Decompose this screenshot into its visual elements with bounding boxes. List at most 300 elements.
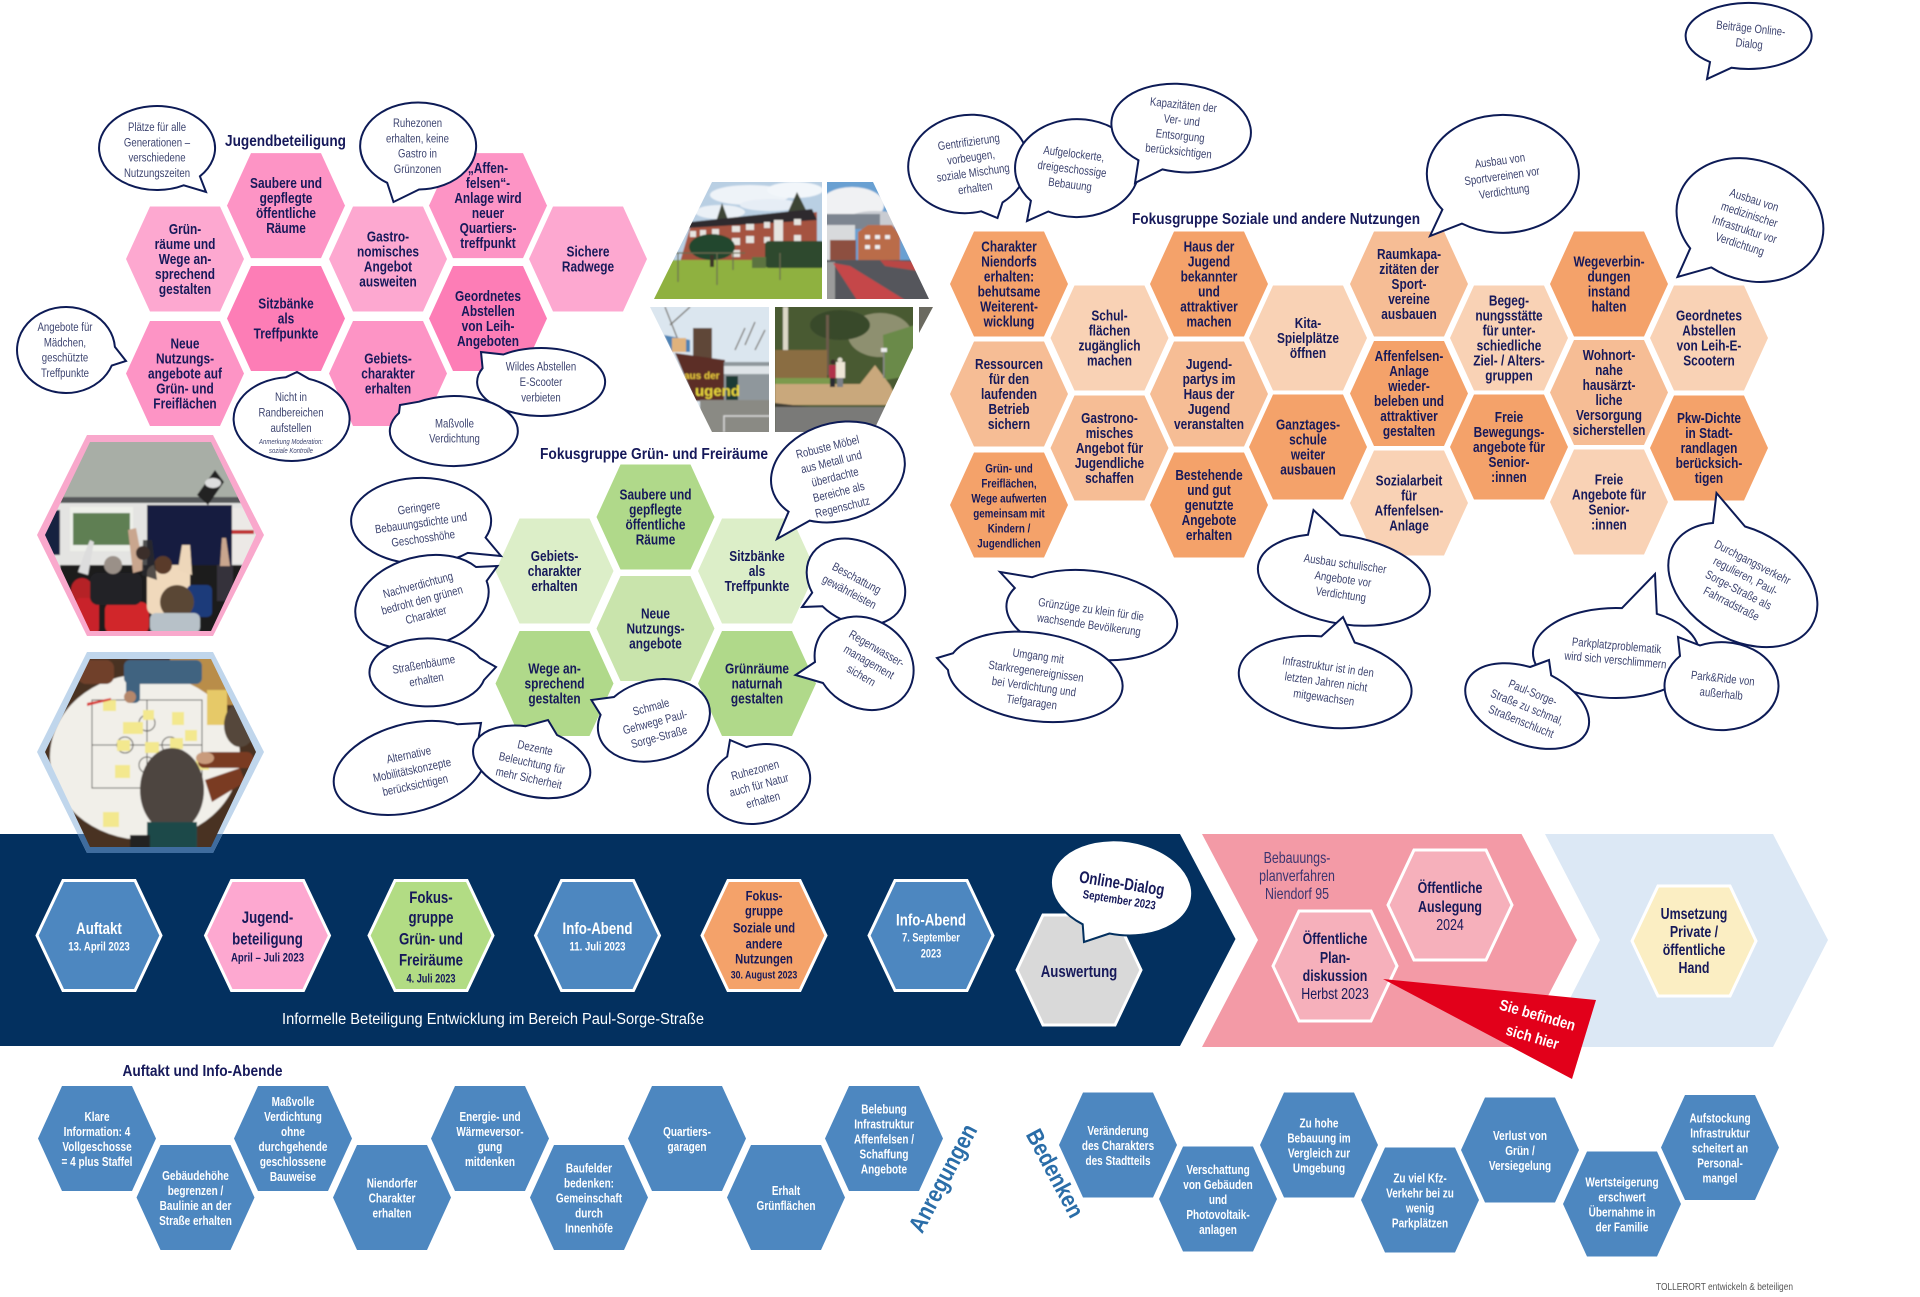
hexagon: Geordnetes Abstellen: Abstellen (461, 303, 515, 319)
callout: Plätze für alle Generationen: Generationen – (124, 136, 191, 150)
photo: Straße mit Radweg (827, 182, 929, 299)
photo sliver (919, 307, 933, 333)
timeline: Jugendbeteiligung: Jugend- (242, 909, 293, 927)
photo collage: Paul-Sorge-Straße (648, 180, 935, 435)
hexagon: Gebäudehöhe: Gebäudehöhe (162, 1169, 229, 1183)
callout: Ausbau von Sportvereinen: Ausbau von (1474, 151, 1526, 171)
callout: Grünzüge zu klein: wachsende Bevölkerung (1035, 611, 1142, 639)
hexagon: Wohnortnahe Versorgung: hausärzt- (1583, 377, 1635, 393)
hexagon: Raumkapazitäten: Sport- (1392, 276, 1426, 292)
callout: Robuste Möbel: Regenschutz (814, 495, 871, 521)
timeline: Öffentliche Auslegung: Auslegung (1418, 898, 1482, 915)
hexagon: Begegnungsstätte: nungsstätte (1475, 307, 1543, 324)
hexagon: Affenfelsen-Anlage: treffpunkt (460, 235, 516, 251)
hexagon: Belebung Infrastruktur: Angebote (861, 1162, 908, 1177)
hexagon: Haus der Jugend: bekannter (1181, 268, 1237, 285)
hexagon: Klare Information: Vollgeschosse (62, 1140, 132, 1154)
hexagon: Bestehende Angebote: und gut (1187, 482, 1231, 498)
callout: Paul-Sorge-Straße zu schmal: Paul-Sorge- (1506, 678, 1559, 709)
callout: Robuste Möbel: überdachte (810, 465, 860, 490)
callout: Park&Ride: Park&Ride von (1690, 669, 1755, 689)
hexagon: Haus der Jugend: Haus der (1184, 238, 1234, 255)
hexagon: Baufelder (530, 1145, 648, 1250)
hexagon: Neue Nutzungsangebote: Neue (641, 605, 670, 622)
callout: Umgang mit Starkregen: Umgang mit (1012, 646, 1065, 667)
hexagon: Freie Bewegungsangebote: Senior- (1489, 454, 1529, 470)
callout: Geringere Bebauungsdichte: Bebauungsdichte und (374, 511, 468, 537)
callout: Regenwassermanagement: sichern (844, 663, 878, 689)
hexagon: Pkw-Dichte: in Stadt- (1685, 425, 1733, 441)
callout: Infrastruktur nicht mitgewachsen: Infrastruktur ist in den (1281, 654, 1375, 680)
hexagon: Sitzbänke: Treffpunkte (725, 578, 789, 594)
callout: Robuste Möbel: aus Metall und (800, 449, 863, 477)
hexagon: Jugendpartys (1150, 342, 1268, 446)
callout: Ausbau von Sportvereinen: Verdichtung (1478, 182, 1530, 202)
timeline: Jugendbeteiligung (206, 880, 330, 990)
callout: Aufgelockerte Bebauung: dreigeschossige (1037, 159, 1107, 180)
hexagon: Grünräume und Wege: gestalten (159, 281, 211, 297)
callout: Beiträge Online-Dialog: Beiträge Online- (1716, 19, 1786, 39)
hexagon: Verschattung (1159, 1146, 1277, 1252)
callout: Ruhezonen erhalten: Ruhezonen (393, 117, 442, 130)
hexagon: Sitzbänke: als (749, 563, 765, 579)
timeline: Öffentliche Auslegung: 2024 (1436, 916, 1464, 933)
timeline: Info-Abend 11. Juli: Info-Abend (563, 920, 632, 938)
hexagon: Geordnetes Abstellen: Angeboten (457, 333, 519, 349)
hexagon: Wege ansprechend: sprechend (524, 675, 585, 692)
callout: Ruhezonen erhalten: Gastro in (398, 148, 437, 161)
hexagon: Grün- und Freiflächen: gemeinsam mit (973, 508, 1045, 521)
hexagon: Grün- und Freiflächen: Freiflächen, (981, 478, 1037, 491)
hexagon: Neue Nutzungsangebote: angebote (629, 635, 682, 652)
callout: Geringere Bebauungsdichte: Geschosshöhe (391, 528, 456, 550)
hexagon: Quartiersgaragen (628, 1086, 746, 1191)
timeline: Auftakt (37, 880, 161, 990)
callout: Ruhezonen für Natur (708, 740, 810, 824)
hexagon: Gebietscharakter: erhalten (531, 578, 578, 594)
hexagon: Saubere und gepflegte Räume: öffentliche (625, 516, 686, 533)
hexagon: Saubere und gepflegte Räume: Räume (636, 531, 675, 548)
hexagon: Neue Nutzungsangebote: Neue (170, 335, 200, 352)
hexagon: Veränderung des Charakters (1059, 1092, 1177, 1198)
hexagon: Geordnetes Abstellen: von Leih- (462, 318, 514, 334)
hexagon: Bestehende Angebote (1150, 452, 1268, 558)
panel: Fokusgruppe Grün hexagons (496, 464, 816, 736)
callout: Nachverdichtung: Charakter (404, 604, 449, 627)
callout: Infrastruktur nicht mitgewachsen (1239, 617, 1412, 728)
hexagon: Baufelder: bedenken: (564, 1176, 614, 1191)
hexagon: Wohnortnahe Versorgung: liche (1595, 392, 1623, 408)
hexagon: Veränderung des Charakters: des Stadtteils (1085, 1154, 1151, 1168)
marker: Sie befinden sich hier: Sie befinden (1497, 997, 1577, 1035)
hexagon: Affenfelsen-Anlage wiederbeleben: wieder- (1387, 378, 1430, 394)
marker: Sie befinden sich hier: sich hier (1504, 1022, 1561, 1054)
hexagon: Baufelder: Baufelder (566, 1161, 612, 1176)
callout: Beiträge Online-Dialog: Dialog (1735, 36, 1763, 52)
callout: Aufgelockerte Bebauung: Aufgelockerte, (1043, 144, 1105, 165)
callout: Aufgelockerte Bebauung: Bebauung (1048, 176, 1093, 194)
callout: Durchgangsverkehr: Sorge-Straße als (1703, 568, 1774, 613)
timeline: Fokusgruppe Grün- und Freiräume: 4. Juli 2023 (406, 974, 456, 986)
hexagon: Grünräume und Wege: räume und (155, 236, 215, 252)
callout: Alternative Mobilitätskonzepte: Mobilitätskonzepte (372, 756, 452, 785)
photo: Versammlung Auftakt (37, 435, 264, 636)
hexagon: Verlust von Grün: Versiegelung (1489, 1159, 1551, 1173)
callout: Umgang mit Starkregen: bei Verdichtung und (991, 675, 1077, 700)
hexagon: Zu viel Kfz-Verkehr (1361, 1148, 1479, 1252)
hexagon: Grün- und Freiflächen: Kindern / (988, 523, 1030, 536)
timeline: Fokusgruppe Soziale: andere (746, 936, 782, 952)
timeline: Umsetzung: Hand (1679, 959, 1709, 976)
hexagon: Wege ansprechend (496, 631, 614, 736)
hexagon: Wertsteigerung: der Familie (1596, 1220, 1649, 1235)
hexagon: Charakter Niendorfs: Weiterent- (980, 298, 1038, 315)
hexagon: Affenfelsen-Anlage: „Affen- (468, 160, 508, 176)
timeline: Auftakt: Auftakt (76, 920, 122, 938)
title: Auftakt und Info-Abende: Auftakt und Info-Abende (122, 1063, 283, 1080)
callout: Alternative Mobilitätskonzepte (334, 721, 486, 815)
hexagon: Bestehende Angebote: Angebote (1182, 512, 1236, 528)
timeline: Öffentliche Plandiskussion: Herbst 2023 (1301, 985, 1369, 1002)
hexagon: Gastronomisches Angebot: nomisches (357, 243, 419, 260)
timeline: Öffentliche Auslegung: Öffentliche (1418, 879, 1483, 896)
callout: Umgang mit Starkregen: Starkregenereignissen (988, 659, 1084, 685)
hexagon: Ressourcen: laufenden (981, 386, 1037, 402)
hexagon: Raumkapazitäten: ausbauen (1381, 306, 1437, 322)
hexagon: Affenfelsen-Anlage wiederbeleben: attraktiver (1380, 408, 1438, 424)
callout: Straßenbäume: Straßenbäume (391, 653, 456, 677)
hexagon: Wegeverbindungen: Wegeverbin- (1573, 253, 1645, 270)
hexagon: Schulflächen: zugänglich (1078, 337, 1141, 354)
hexagon: Gebietscharakter: Gebiets- (364, 350, 412, 367)
hexagon: Energie- und Wärmeversorgung: Wärmeversor- (456, 1125, 524, 1139)
hexagon: Sitzbänke: Sitzbänke (729, 548, 785, 564)
callout: Parkplatzproblematik: wird sich verschlimmern (1563, 650, 1667, 672)
hexagon: Sitzbänke (227, 266, 345, 371)
timeline: Jugendbeteiligung: April – Juli 2023 (231, 952, 304, 965)
timeline: Fokusgruppe Soziale: Soziale und (733, 920, 795, 936)
hexagon: Pkw-Dichte (1650, 396, 1768, 500)
hexagon: Haus der Jugend: und (1198, 283, 1220, 300)
callout: Nicht in Randbereichen: Nicht in (275, 391, 307, 404)
callout: Ruhezonen für Natur: auch für Natur (728, 771, 791, 800)
hexagon: Energie- und Wärmeversorgung: gung (478, 1140, 502, 1154)
hexagon: Grünräume und Wege (126, 206, 244, 312)
hexagon: Belebung Infrastruktur: Schaffung (860, 1147, 908, 1162)
hexagon: Raumkapazitäten (1350, 232, 1468, 336)
callout: Angebote für Mädchen: Treffpunkte (41, 367, 89, 381)
callout: Paul-Sorge-Straße zu schmal (1465, 660, 1589, 749)
hexagon: Saubere und gepflegte Räume (596, 464, 714, 570)
hexagon: Erhalt Grünflächen: Erhalt (772, 1184, 800, 1198)
hexagon: Freie Bewegungsangebote: Bewegungs- (1474, 424, 1544, 440)
hexagon: Kita-Spielplätze: öffnen (1290, 345, 1326, 361)
hexagon: Niendorfer Charakter: erhalten (373, 1206, 411, 1221)
callout: Durchgangsverkehr: Durchgangsverkehr (1712, 538, 1793, 588)
timeline: Info-Abend 7. September: Info-Abend (896, 911, 966, 930)
hexagon: Gebäudehöhe: begrenzen / (168, 1184, 224, 1198)
hexagon: Sichere Radwege (529, 206, 647, 312)
hexagon: Gastronomisches Angebot: Gastro- (367, 228, 409, 245)
callout: Maßvolle Verdichtung: Verdichtung (429, 433, 480, 446)
photo: Haus der Jugend: aus der (684, 371, 720, 382)
hexagon: Geordnetes Abstellen E-Scooter: Scootern (1683, 352, 1735, 369)
timeline: Öffentliche Auslegung (1388, 850, 1512, 960)
hexagon: Saubere und gepflegte Räume: Räume (266, 220, 306, 236)
callout: Wildes Abstellen: Wildes Abstellen (506, 361, 576, 374)
hexagon: Saubere und gepflegte Räume (227, 153, 345, 258)
hexagon: Veränderung des Charakters: Veränderung (1087, 1124, 1149, 1138)
hexagon: Sozialarbeit: Sozialarbeit (1376, 472, 1443, 489)
hexagon: Ganztagesschule: ausbauen (1280, 461, 1336, 478)
hexagon: Schulflächen: Schul- (1091, 307, 1128, 324)
callout: Beschattung: Beschattung (830, 560, 883, 597)
text: Bebauungsplanverfahren Niendorf 95: Niendorf 95 (1265, 885, 1329, 902)
hexagon: Klare Information: Klare (84, 1110, 110, 1124)
hexagon: Wertsteigerung: Übernahme in (1589, 1205, 1655, 1220)
hexagon: Maßvolle Verdichtung (234, 1086, 352, 1191)
hexagon: Grün- und Freiflächen: Wege aufwerten (971, 493, 1047, 506)
hexagon: Ganztagesschule: schule (1289, 431, 1327, 448)
hexagon: Haus der Jugend (1150, 232, 1268, 336)
hexagon: Wohnortnahe Versorgung (1550, 340, 1668, 445)
callout: Durchgangsverkehr: Fahrradstraße (1701, 585, 1761, 624)
hexagon: Sichere Radwege: Sichere (567, 243, 609, 260)
hexagon: Charakter Niendorfs: Charakter (981, 238, 1037, 255)
callout: Nicht in Randbereichen: soziale Kontrolle (269, 447, 313, 455)
hexagon: Gebäudehöhe: Baulinie an der (160, 1199, 232, 1213)
hexagon: Pkw-Dichte: Pkw-Dichte (1677, 410, 1741, 426)
chevron: Umsetzung (1545, 834, 1828, 1047)
hexagon: Jugendpartys: veranstalten (1174, 416, 1244, 432)
hexagon: Verschattung: von Gebäuden (1183, 1178, 1253, 1192)
callout: Ausbau von Sportvereinen: Sportvereinen vor (1464, 165, 1541, 189)
hexagon: Freie Bewegungsangebote: Freie (1495, 409, 1523, 425)
callout: Schmale Gehwege: Schmale (631, 696, 671, 719)
hexagon: Kita-Spielplätze: Spielplätze (1277, 330, 1339, 346)
hexagon: Bestehende Angebote: genutzte (1185, 497, 1233, 513)
hexagon: Grünräume naturnah: gestalten (731, 690, 783, 707)
timeline: Info-Abend 7. September: 2023 (921, 949, 941, 961)
callout: Durchgangsverkehr (1668, 493, 1817, 647)
callout: Kapazitäten: berücksichtigen (1145, 142, 1212, 162)
hexagon: Ressourcen: für den (989, 371, 1029, 387)
hexagon: Kita-Spielplätze: Kita- (1295, 315, 1321, 331)
callout: Gentrifizierung: erhalten (957, 180, 993, 198)
hexagon: Begegnungsstätte (1450, 286, 1568, 390)
hexagon: Neue Nutzungsangebote (596, 576, 714, 681)
callout: Ausbau medizinischer Infrastruktur: Verdichtung (1713, 231, 1766, 259)
callout: Angebote für Mädchen: Angebote für (38, 321, 93, 334)
callout: Online-Dialog (1051, 840, 1192, 942)
label: Anregungen: Anregungen (903, 1119, 983, 1237)
photo: Wohnhaus mit Wiese (650, 180, 825, 302)
hexagon: Zu hohe Bebauung: Zu hohe (1300, 1116, 1339, 1131)
hexagon: Wohnortnahe Versorgung: nahe (1595, 362, 1623, 378)
hexagon: Gastronomisches Angebot für Jugendliche: schaffen (1085, 470, 1134, 486)
hexagon: Kita-Spielplätze (1249, 286, 1367, 390)
hexagon: Wege ansprechend: Wege an- (528, 660, 581, 677)
hexagon: Aufstockung: Personal- (1697, 1156, 1743, 1171)
hexagon: Schulflächen: flächen (1089, 322, 1130, 339)
hexagon: Saubere und gepflegte Räume: öffentliche (256, 205, 316, 221)
hexagon: Haus der Jugend: attraktiver (1180, 298, 1238, 315)
hexagon: Neue Nutzungsangebote: angebote auf (148, 365, 222, 382)
hexagon: Ressourcen: sichern (988, 416, 1030, 432)
callout: Plätze für alle Generationen: Nutzungszeiten (124, 167, 190, 181)
timeline: Fokusgruppe Grün- und Freiräume (369, 880, 493, 990)
callout: Gentrifizierung: vorbeugen, (946, 148, 996, 168)
hexagon: Charakter Niendorfs: Niendorfs (981, 253, 1037, 270)
callout: Beschattung: gewährleisten (820, 573, 878, 612)
hexagon: Affenfelsen-Anlage wiederbeleben: gestalten (1383, 423, 1435, 439)
hexagon: Pkw-Dichte: berücksich- (1676, 455, 1742, 471)
hexagon: Begegnungsstätte: für unter- (1483, 322, 1535, 339)
hexagon: Zu viel Kfz-Verkehr: Verkehr bei zu (1386, 1186, 1454, 1201)
timeline: Jugendbeteiligung: beteiligung (232, 930, 303, 949)
hexagon: Grün- und Freiflächen: Grün- und (985, 463, 1033, 476)
callout: Dezente Beleuchtung (473, 720, 590, 798)
photo: Fußweg mit Spaziergängern (773, 305, 915, 435)
panel: Anregungen hexagons (38, 1086, 943, 1250)
callout: Schmale Gehwege (591, 679, 710, 762)
hexagon: Raumkapazitäten: vereine (1388, 291, 1430, 307)
timeline: Info-Abend 7. September: 7. September (902, 933, 960, 945)
callout: Umgang mit Starkregen: Tiefgaragen (1006, 693, 1058, 713)
hexagon: Gebietscharakter (496, 518, 614, 624)
hexagon: Sitzbänke: Sitzbänke (258, 295, 314, 312)
hexagon: Verlust von Grün (1461, 1098, 1579, 1202)
hexagon: Saubere und gepflegte Räume: gepflegte (629, 501, 682, 518)
hexagon: Gastronomisches Angebot für Jugendliche: Angebot für (1076, 440, 1143, 456)
hexagon: Energie- und Wärmeversorgung: Energie- und (459, 1110, 521, 1124)
hexagon: Verlust von Grün: Verlust von (1493, 1129, 1547, 1143)
hexagon: Zu hohe Bebauung: Bebauung im (1287, 1131, 1351, 1146)
hexagon: Aufstockung (1661, 1095, 1779, 1200)
hexagon: Saubere und gepflegte Räume: Saubere und (250, 175, 322, 191)
hexagon: Saubere und gepflegte Räume: Saubere und (620, 486, 691, 503)
timeline: Fokusgruppe Soziale: 30. August 2023 (731, 970, 798, 982)
hexagon: Sozialarbeit: für (1401, 487, 1417, 504)
callout: Geringere Bebauungsdichte (351, 478, 501, 564)
text: Bebauungsplanverfahren Niendorf 95 (1259, 849, 1335, 902)
hexagon: Affenfelsen-Anlage wiederbeleben: Affenfelsen- (1375, 348, 1443, 364)
hexagon: Erhalt Grünflächen (727, 1145, 845, 1250)
callout: Infrastruktur nicht mitgewachsen: mitgewachsen (1292, 687, 1355, 709)
heading: Informelle Beteiligung: Informelle Beteiligung Entwicklung im Bereich Paul-Sorge-Straße (282, 1011, 704, 1028)
hexagon: Geordnetes Abstellen E-Scooter: von Leih-E- (1677, 337, 1741, 354)
photo: Haus der Jugend (648, 305, 773, 435)
hexagon: Affenfelsen-Anlage (429, 153, 547, 258)
hexagon: Grün- und Freiflächen: Jugendlichen (977, 538, 1041, 551)
callout: Plätze für alle Generationen (99, 106, 215, 192)
hexagon: Freie Bewegungsangebote: angebote für (1473, 439, 1545, 455)
hexagon: Zu hohe Bebauung (1260, 1092, 1378, 1198)
timeline: Auftakt: 13. April 2023 (68, 941, 130, 954)
callout: Robuste Möbel (771, 421, 905, 539)
hexagon: Wohnortnahe Versorgung: sicherstellen (1573, 422, 1645, 438)
hexagon: Sozialarbeit (1350, 450, 1468, 556)
callout: Durchgangsverkehr: regulieren, Paul- (1711, 555, 1780, 599)
timeline: Fokusgruppe Grün- und Freiräume: gruppe (409, 909, 453, 927)
callout: Ausbau schulischer Angebote: Ausbau schulischer (1303, 552, 1388, 577)
hexagon: Baufelder: Gemeinschaft (556, 1191, 622, 1206)
callout: Ausbau schulischer Angebote: Verdichtung (1315, 585, 1367, 605)
hexagon: Gebietscharakter: charakter (361, 365, 415, 382)
hexagon: Ressourcen: Ressourcen (975, 356, 1043, 372)
hexagon: Gebietscharakter (329, 321, 447, 426)
callout: Angebote für Mädchen: geschützte (42, 352, 88, 365)
hexagon: Klare Information: = 4 plus Staffel (62, 1155, 132, 1169)
hexagon: Affenfelsen-Anlage: neuer (472, 205, 504, 221)
hexagon: Erhalt Grünflächen: Grünflächen (757, 1199, 815, 1213)
hexagon: Maßvolle Verdichtung: Bauweise (270, 1170, 317, 1184)
hexagon: Gebäudehöhe: Straße erhalten (159, 1214, 232, 1228)
hexagon: Freie Angebote: Freie (1595, 471, 1623, 488)
timeline: Öffentliche Plandiskussion: Plan- (1320, 949, 1350, 966)
callout: Plätze für alle Generationen: verschiedene (128, 152, 186, 165)
callout: Geringere Bebauungsdichte: Geringere (397, 499, 441, 518)
hexagon: Bestehende Angebote: Bestehende (1175, 467, 1243, 483)
timeline: Fokusgruppe Soziale: Fokus- (746, 888, 782, 904)
timeline: Öffentliche Plandiskussion: diskussion (1303, 967, 1367, 984)
hexagon: Wege ansprechend: gestalten (528, 690, 581, 707)
callout: Ausbau schulischer Angebote: Angebote vor (1314, 569, 1372, 590)
hexagon: Klare Information (38, 1086, 156, 1191)
hexagon: Grünräume naturnah: Grünräume (725, 660, 789, 677)
timeline: Fokusgruppe Soziale: gruppe (745, 903, 783, 919)
hexagon: Grünräume naturnah: naturnah (732, 675, 782, 692)
hexagon: Charakter Niendorfs (950, 232, 1068, 336)
hexagon: Zu viel Kfz-Verkehr: Parkplätzen (1392, 1216, 1448, 1231)
hexagon: Maßvolle Verdichtung: Maßvolle (272, 1095, 315, 1109)
timeline: Auswertung: Auswertung (1041, 963, 1117, 981)
hexagon: Jugendpartys: Jugend- (1186, 356, 1232, 372)
hexagon: Grün- und Freiflächen (950, 452, 1068, 558)
hexagon: Energie- und Wärmeversorgung: mitdenken (465, 1155, 515, 1169)
hexagon: Haus der Jugend: machen (1187, 313, 1231, 330)
callout: Ausbau medizinischer Infrastruktur: medizinischer (1719, 200, 1779, 231)
timeline: Info-Abend 11. Juli: 11. Juli 2023 (569, 941, 626, 954)
panel: Bedenken hexagons (1059, 1092, 1779, 1256)
callout: Ausbau medizinischer Infrastruktur (1677, 158, 1823, 282)
callout: Regenwassermanagement: management (841, 643, 896, 682)
callout: Ruhezonen für Natur: Ruhezonen (730, 758, 781, 783)
hexagon: Neue Nutzungsangebote: Freiflächen (153, 395, 217, 412)
hexagon: Gastronomisches Angebot (329, 206, 447, 312)
callout: Beiträge Online-Dialog (1686, 3, 1812, 79)
hexagon: Wertsteigerung (1563, 1152, 1681, 1256)
hexagon: Niendorfer Charakter: Charakter (369, 1191, 416, 1206)
callout: Ausbau von Sportvereinen (1427, 115, 1579, 236)
callout: Gentrifizierung (908, 115, 1028, 218)
hexagon: Verschattung: Photovoltaik- (1186, 1208, 1250, 1222)
hexagon: Grünräume naturnah (698, 631, 816, 736)
hexagon: Jugendpartys: Jugend (1188, 401, 1230, 417)
hexagon: Gebietscharakter: charakter (528, 563, 581, 579)
callout: Online-Dialog: Online-Dialog (1078, 868, 1166, 900)
callout: Dezente Beleuchtung: mehr Sicherheit (494, 765, 563, 792)
hexagon: Affenfelsen-Anlage: Quartiers- (460, 220, 516, 236)
hexagon: Belebung Infrastruktur: Belebung (861, 1102, 907, 1117)
hexagon: Charakter Niendorfs: wicklung (983, 313, 1034, 330)
hexagon: Wohnortnahe Versorgung: Versorgung (1576, 407, 1642, 423)
callout: Paul-Sorge-Straße zu schmal: Straßenschlucht (1486, 703, 1556, 741)
hexagon: Wegeverbindungen: instand (1588, 283, 1630, 300)
hexagon: Grünräume und Wege: Grün- (169, 221, 201, 237)
callout: Parkplatzproblematik: Parkplatzproblematik (1571, 636, 1662, 657)
timeline: Fokusgruppe Soziale: Nutzungen (735, 951, 793, 967)
